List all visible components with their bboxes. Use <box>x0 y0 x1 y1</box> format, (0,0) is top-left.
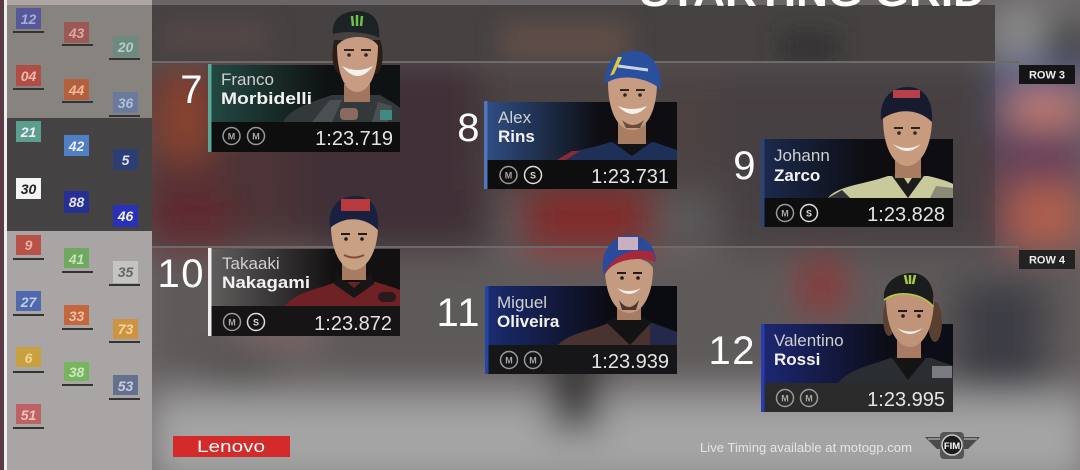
row 3 label <box>1019 65 1075 84</box>
tile 27 <box>13 291 44 316</box>
tile 53 <box>109 375 140 400</box>
lap time: 1:23.872 <box>314 313 392 335</box>
position number: 7 <box>180 68 204 112</box>
tyre badges: M <box>505 356 513 366</box>
tyre badges <box>776 390 818 406</box>
tile 30: 30 <box>21 181 36 197</box>
tile 12 <box>13 8 44 33</box>
card background <box>484 102 677 189</box>
tile 42: 42 <box>68 138 84 154</box>
position number: 9 <box>733 144 757 188</box>
top panel <box>152 5 995 62</box>
tile 5 <box>113 149 138 170</box>
tile 46 <box>113 205 138 227</box>
tyre badges: S <box>253 318 259 328</box>
first name: Franco <box>221 70 274 89</box>
tile 35 <box>109 261 140 286</box>
tile 73 <box>109 319 140 343</box>
tile 42 <box>64 135 89 156</box>
card background <box>761 324 953 412</box>
colour bar <box>761 139 764 227</box>
tile 36: 36 <box>118 95 133 111</box>
portrait <box>558 235 677 345</box>
tile 04: 04 <box>21 68 36 84</box>
surname: Rossi <box>774 350 820 369</box>
driver card: Valentino Rossi <box>708 273 953 412</box>
icon: FIM logo: FIM <box>944 441 960 452</box>
tyre badges <box>776 204 818 222</box>
tile 30 <box>16 178 41 199</box>
first name: Johann <box>774 146 830 165</box>
tile 53: 53 <box>118 378 133 394</box>
tile 88: 88 <box>69 194 84 210</box>
tile 41: 41 <box>68 251 84 267</box>
card background <box>208 65 400 152</box>
tyre badges <box>500 352 542 368</box>
lap time: 1:23.995 <box>867 389 945 411</box>
colour bar <box>484 101 488 189</box>
tile 04 <box>13 65 44 90</box>
tile 9 <box>13 235 44 260</box>
portrait <box>557 51 677 160</box>
lap time strip <box>485 345 677 374</box>
lap time strip <box>208 306 400 336</box>
lap time strip <box>761 198 953 227</box>
tyre badges <box>500 166 542 184</box>
card background <box>485 286 677 374</box>
surname: Oliveira <box>497 312 560 331</box>
tile 6 <box>13 347 44 373</box>
tyre badges: M <box>505 170 512 180</box>
lap time strip <box>761 383 953 412</box>
portrait <box>285 196 400 306</box>
tyre badges: S <box>530 170 536 180</box>
tile 35: 35 <box>118 264 133 280</box>
driver card: Takaaki Nakagami <box>158 196 400 336</box>
tile 20: 20 <box>117 39 133 55</box>
position number: 10 <box>158 252 205 296</box>
driver card: Alex Rins <box>457 51 677 189</box>
tile 73: 73 <box>118 321 133 337</box>
driver card: Miguel Oliveira <box>436 235 677 374</box>
tile 43 <box>62 22 93 46</box>
first name: Valentino <box>774 331 844 350</box>
tile 21: 21 <box>20 124 36 140</box>
tyre badges: M <box>228 132 235 142</box>
first name: Takaaki <box>222 254 280 273</box>
card background <box>761 139 953 227</box>
tile 9: 9 <box>25 237 33 253</box>
driver card: Franco Morbidelli <box>180 11 400 152</box>
colour bar <box>485 286 488 374</box>
tyre badges: M <box>805 394 813 404</box>
lap time: 1:23.828 <box>867 204 945 226</box>
row 4 label: ROW 4 <box>1029 254 1066 266</box>
row 3 label: ROW 3 <box>1029 70 1065 82</box>
tile 12: 12 <box>21 11 36 27</box>
tyre badges: M <box>252 132 260 142</box>
panel: grid sidebar <box>0 0 152 470</box>
surname: Morbidelli <box>221 89 312 108</box>
position number: 8 <box>457 106 481 150</box>
surname: Rins <box>498 127 535 146</box>
lenovo logo <box>173 436 290 457</box>
row divider lines <box>152 61 1019 248</box>
portrait <box>828 87 953 198</box>
tyre badges <box>223 128 264 144</box>
tile 88 <box>64 191 89 213</box>
portrait <box>838 273 953 383</box>
tile 5: 5 <box>122 152 130 168</box>
tile 44: 44 <box>68 82 84 98</box>
tile 51 <box>13 404 44 429</box>
tile 20 <box>109 36 140 60</box>
surname: Nakagami <box>222 273 310 292</box>
lap time strip <box>208 122 400 152</box>
surname: Zarco <box>774 166 820 185</box>
tile 38: 38 <box>69 364 84 380</box>
lap time: 1:23.939 <box>591 351 669 373</box>
tile 41 <box>62 248 93 273</box>
driver card: Johann Zarco <box>733 87 953 227</box>
colour bar <box>208 248 212 336</box>
lap time: 1:23.731 <box>591 166 669 188</box>
tile 43: 43 <box>68 25 84 41</box>
colour bar <box>761 324 764 412</box>
lap time: 1:23.719 <box>315 128 393 150</box>
row 4 label <box>1019 250 1075 269</box>
middle grid tint <box>152 63 995 247</box>
card background <box>208 249 400 336</box>
tile 51: 51 <box>21 407 36 423</box>
portrait <box>283 11 400 122</box>
tyre badges: M <box>781 394 789 404</box>
tyre badges <box>224 314 264 330</box>
first name: Alex <box>498 108 532 127</box>
tyre badges: M <box>781 208 789 218</box>
tyre badges: M <box>529 356 537 366</box>
live timing note: Live Timing available at motogp.com <box>700 441 912 455</box>
lenovo logo: Lenovo <box>197 437 265 456</box>
tile 6: 6 <box>25 350 33 366</box>
tile 33: 33 <box>69 308 84 324</box>
tile 36 <box>109 92 140 117</box>
first name: Miguel <box>497 293 547 312</box>
position number: 12 <box>708 329 756 373</box>
tile 46: 46 <box>117 208 133 224</box>
tyre badges: M <box>228 318 236 328</box>
tile 44 <box>62 79 93 103</box>
tile 27: 27 <box>20 294 37 310</box>
lap time strip <box>484 160 677 189</box>
position number: 11 <box>436 291 481 335</box>
tile 33 <box>62 305 93 330</box>
colour bar <box>208 64 212 152</box>
tile 21 <box>16 121 41 142</box>
tyre badges: S <box>806 208 812 218</box>
tile 38 <box>62 362 93 386</box>
icon: FIM logo <box>925 432 980 459</box>
